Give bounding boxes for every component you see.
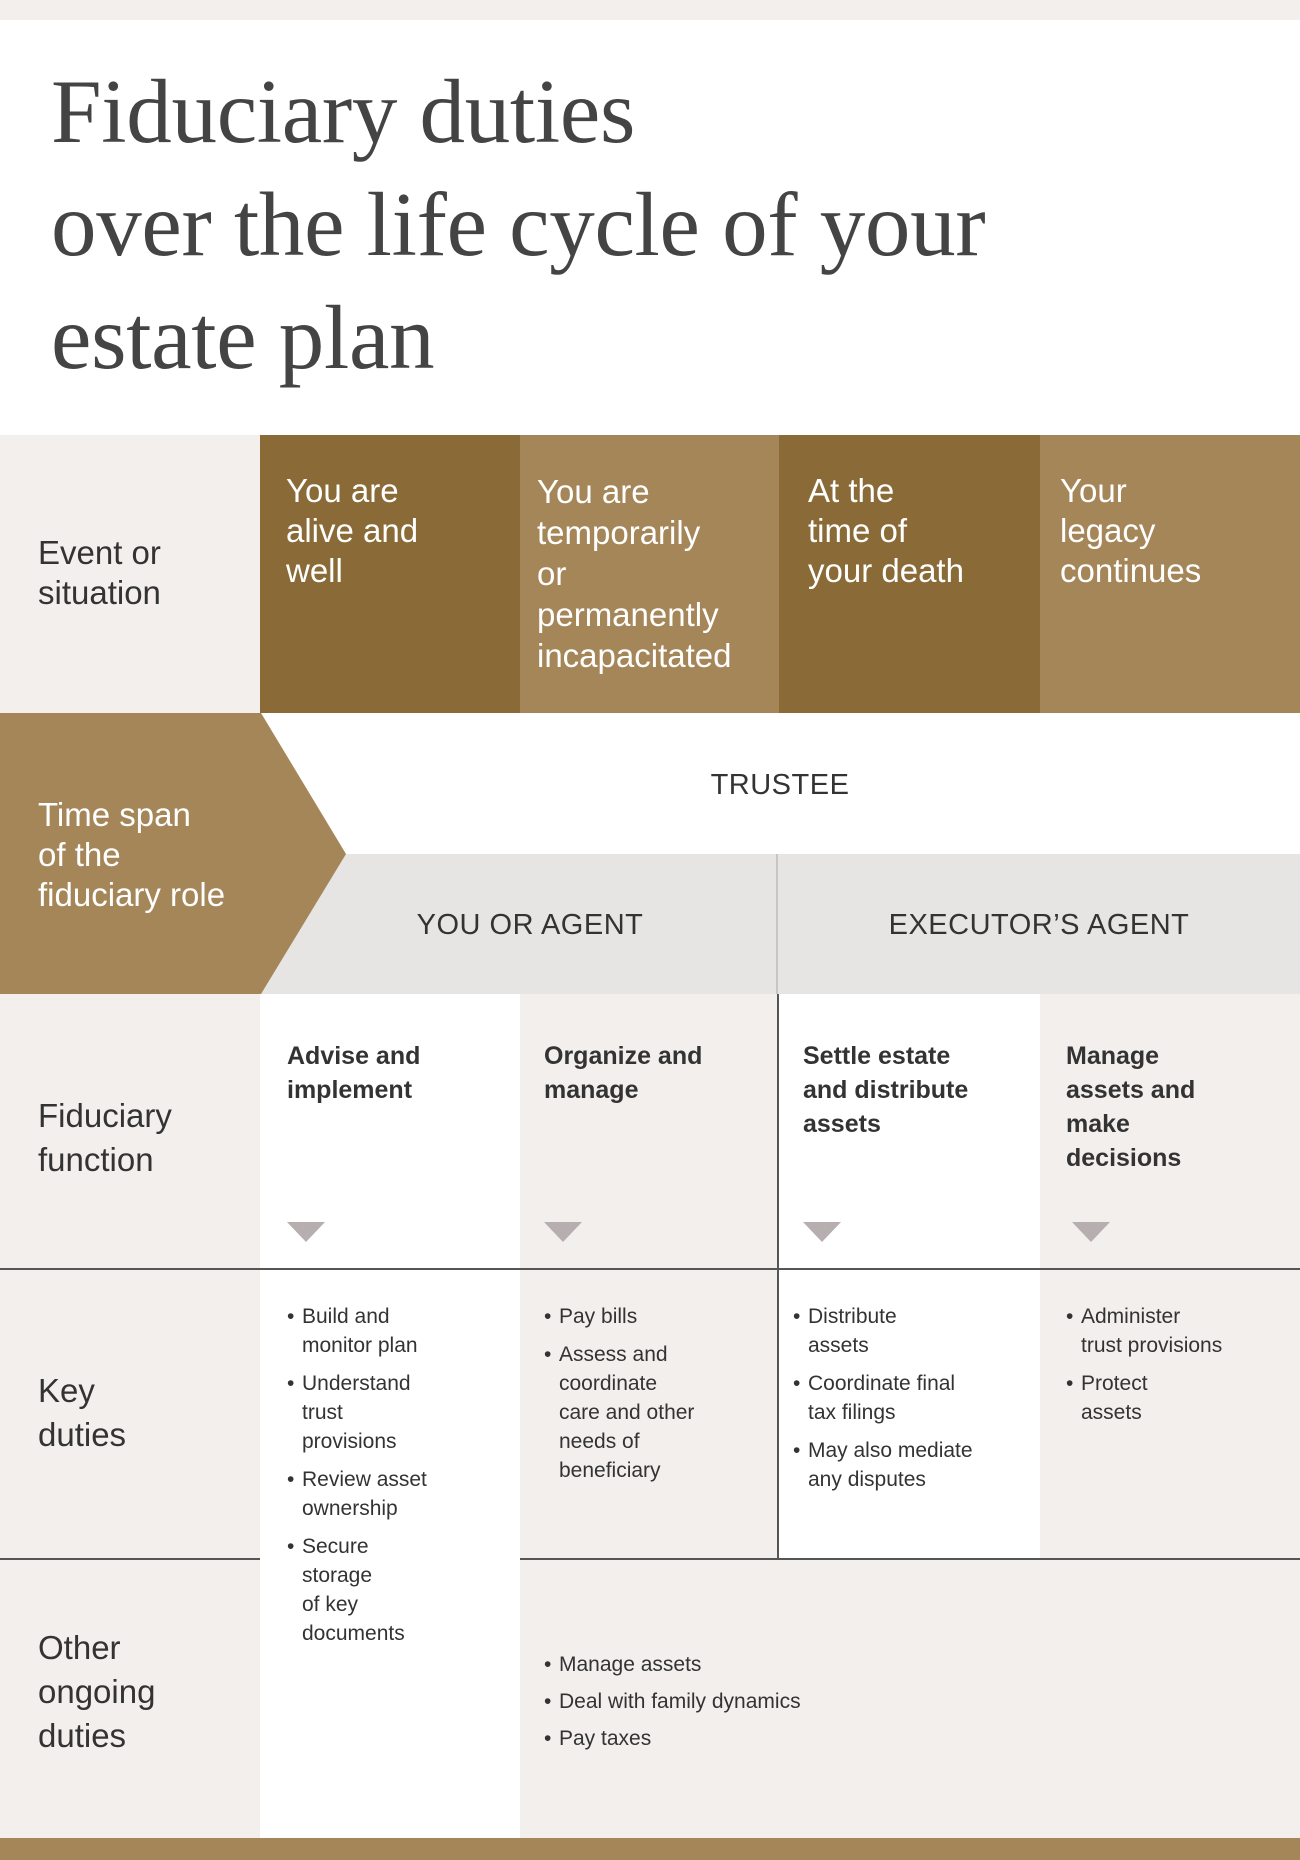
heading: settle: and distribute [803,1076,968,1104]
label: fiduciary function: Fiduciary [38,1097,172,1134]
bullets: advise: monitor plan [302,1334,418,1357]
title: Fiduciary duties [51,61,635,162]
bullets: settle: Distribute [808,1305,897,1328]
bullets: settle: Coordinate final [808,1372,955,1395]
bullets: organize: coordinate [559,1372,657,1395]
title: estate plan [51,287,434,388]
event: incapacitated: You are [537,473,650,510]
heading: advise [287,1042,420,1104]
bullets: organize: Pay bills [559,1305,637,1328]
icon: triangles [287,1222,1110,1242]
bullets: manage: Administer [1081,1305,1180,1328]
heading: settle [803,1042,968,1138]
bullets: advise: provisions [302,1430,397,1453]
row: other ongoing duties [38,1629,801,1754]
bullets: advise: trust [302,1401,343,1424]
bullets: organize [544,1305,694,1482]
event: incapacitated: permanently [537,596,719,633]
heading: advise: Advise and [287,1042,420,1070]
heading: organize: Organize and [544,1042,702,1070]
bullets: settle: any disputes [808,1468,926,1491]
label: fiduciary function: function [38,1141,154,1178]
trustee: TRUSTEE [711,769,849,801]
event: incapacitated [537,473,731,674]
bullets: organize: beneficiary [559,1459,661,1482]
label: other: duties [38,1717,126,1754]
bullets: organize: needs of [559,1430,640,1453]
bullets: advise: ownership [302,1497,398,1520]
heading: organize [544,1042,702,1104]
bullets: advise [288,1305,427,1645]
heading: manage: assets and [1066,1076,1195,1104]
event: incapacitated: temporarily [537,514,700,551]
label: key duties: Key [38,1372,95,1409]
bullets: other [544,1653,801,1750]
bullets: organize: Assess and [559,1343,668,1366]
row: key duties [38,1305,1222,1645]
bullets: advise: storage [302,1564,372,1587]
event: alive and well [286,472,418,589]
label: other: Other [38,1629,121,1666]
bullets: advise: Build and [302,1305,390,1328]
bullets: advise: of key [302,1593,358,1616]
heading: settle: Settle estate [803,1042,950,1070]
bullets: manage: trust provisions [1081,1334,1222,1357]
heading: advise: implement [287,1076,412,1104]
arrow: time span [0,713,346,994]
you or agent: YOU OR AGENT [417,909,643,941]
bullets: advise: documents [302,1622,405,1645]
event: legacy: legacy [1060,512,1155,549]
label: key duties: duties [38,1416,126,1453]
event: alive and well: alive and [286,512,418,549]
bullets: settle: assets [808,1334,869,1357]
heading: manage [1066,1042,1195,1172]
heading: manage: Manage [1066,1042,1159,1070]
label: event: situation [38,574,161,611]
bullets: settle: May also mediate [808,1439,973,1462]
label: time span [38,796,225,913]
heading: manage: decisions [1066,1144,1181,1172]
label: other: ongoing [38,1673,155,1710]
label: time span: fiduciary role [38,876,225,913]
event: death: your death [808,552,964,589]
bullets: manage [1066,1305,1222,1424]
event: alive and well: well [286,552,343,589]
bullets: other: Deal with family dynamics [559,1690,801,1713]
heading: settle: assets [803,1110,881,1138]
event: incapacitated: incapacitated [537,637,731,674]
event: incapacitated: or [537,555,566,592]
bullets: settle: tax filings [808,1401,896,1424]
event: legacy: continues [1060,552,1201,589]
label: fiduciary function [38,1097,172,1178]
heading: manage: make [1066,1110,1130,1138]
row: fiduciary function [38,1042,1195,1242]
row: event or situation [0,435,1300,713]
bullets: advise: Secure [302,1535,369,1558]
event: death: time of [808,512,907,549]
bullets: other: Pay taxes [559,1727,651,1750]
label: time span: Time span [38,796,191,833]
bullets: advise: Review asset [302,1468,427,1491]
event: death: At the [808,472,894,509]
bullets: settle [794,1305,973,1491]
executor's agent: EXECUTOR’S AGENT [889,909,1189,941]
event: legacy [1060,472,1201,589]
heading: organize: manage [544,1076,638,1104]
bullets: other: Manage assets [559,1653,701,1676]
label: event [38,534,161,611]
event: alive and well: You are [286,472,399,509]
backgrounds lower [0,994,260,1838]
bullets: manage: Protect [1081,1372,1148,1395]
title: over the life cycle of your [51,174,985,275]
row: time span [0,713,1300,994]
event: death [808,472,964,589]
label: other [38,1629,155,1754]
label: event: Event or [38,534,161,571]
label: key duties [38,1372,126,1453]
title [51,61,985,388]
label: time span: of the [38,836,121,873]
event: legacy: Your [1060,472,1127,509]
bullets: manage: assets [1081,1401,1142,1424]
bullets: organize: care and other [559,1401,694,1424]
bullets: advise: Understand [302,1372,411,1395]
